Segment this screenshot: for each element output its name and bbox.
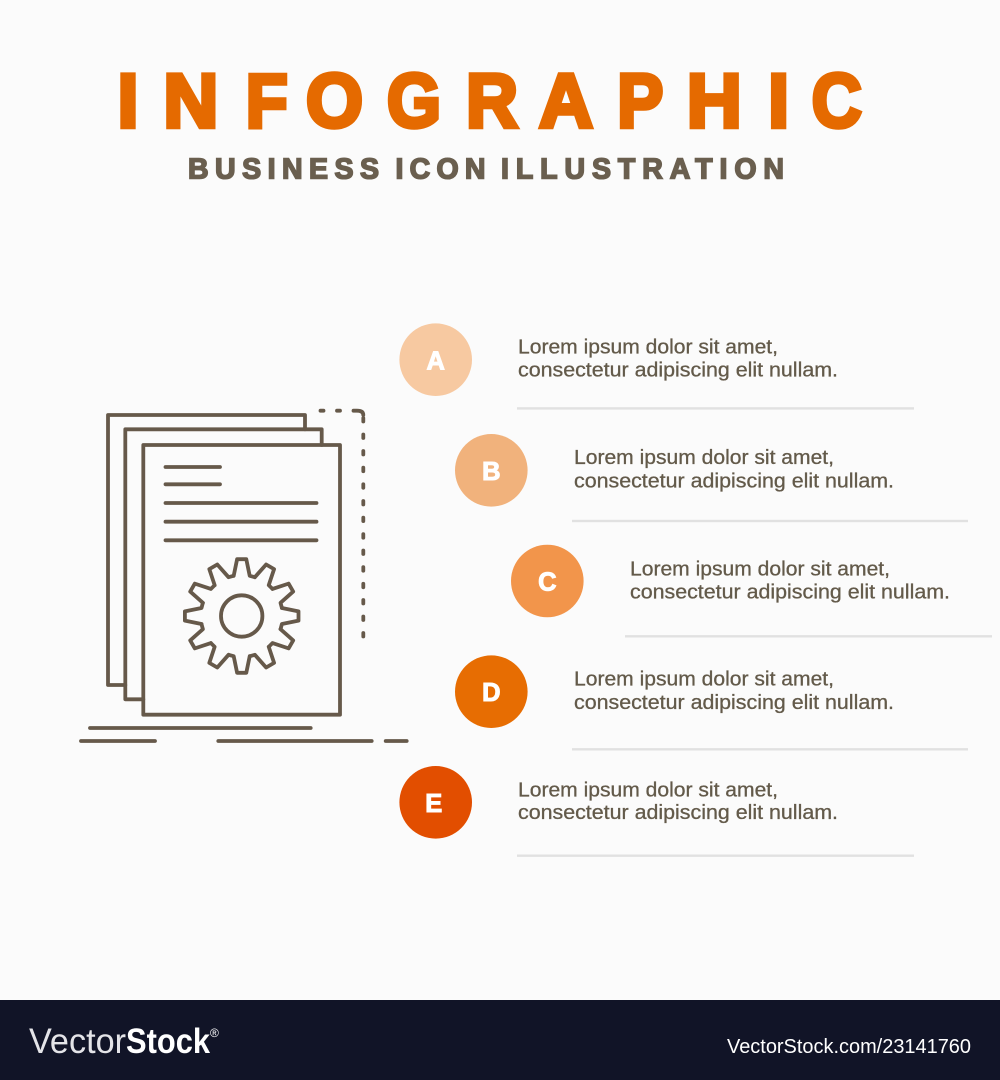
subtitle: BUSINESS: [188, 154, 379, 186]
title: P: [617, 59, 663, 144]
title: F: [246, 59, 288, 144]
letter E: E: [425, 790, 442, 818]
divider C: [625, 635, 992, 638]
text B: consectetur adipiscing elit nullam.: [574, 470, 894, 492]
circle C: [511, 545, 584, 617]
text E: consectetur adipiscing elit nullam.: [518, 802, 838, 824]
footer logo: [29, 1022, 219, 1061]
footer logo: Vector: [29, 1022, 126, 1061]
circle B: [455, 434, 528, 507]
front page: [143, 445, 340, 715]
divider A: [517, 407, 914, 410]
step E: [399, 766, 914, 857]
text C: consectetur adipiscing elit nullam.: [630, 582, 950, 604]
title: O: [306, 59, 363, 144]
gear: [185, 559, 298, 673]
text D: Lorem ipsum dolor sit amet,: [574, 669, 834, 691]
title: H: [687, 59, 742, 144]
text C: Lorem ipsum dolor sit amet,: [630, 559, 890, 581]
letter D: D: [482, 679, 501, 707]
step B: [455, 434, 968, 522]
subtitle: ICON: [396, 154, 486, 186]
dashed outline: [320, 411, 363, 636]
subtitle: ILLUSTRATION: [501, 154, 784, 186]
icon: documents with gear: [81, 411, 407, 741]
subtitle: [188, 154, 784, 186]
circle A: [399, 323, 472, 396]
divider B: [572, 520, 968, 522]
letter A: A: [426, 348, 445, 376]
back page: [108, 415, 305, 685]
footer logo: Stock: [126, 1022, 210, 1061]
letter B: B: [482, 458, 501, 486]
title: [118, 59, 862, 144]
circle D: [455, 655, 528, 728]
step A: [399, 323, 914, 410]
title: N: [163, 59, 218, 144]
text lines on page: [166, 467, 316, 540]
text A: consectetur adipiscing elit nullam.: [518, 360, 838, 382]
text E: Lorem ipsum dolor sit amet,: [518, 779, 778, 801]
divider E: [517, 854, 914, 857]
letter C: C: [538, 568, 557, 596]
footer id: VectorStock.com/23141760: [727, 1036, 971, 1058]
divider D: [572, 748, 968, 750]
title: I: [768, 59, 789, 144]
title: G: [387, 59, 441, 144]
title: R: [466, 59, 518, 144]
title: I: [118, 59, 138, 144]
footer bar: [0, 1000, 1000, 1080]
title: A: [539, 59, 593, 144]
middle page: [125, 429, 322, 699]
ground lines: [81, 728, 407, 741]
text A: Lorem ipsum dolor sit amet,: [518, 336, 778, 358]
text B: Lorem ipsum dolor sit amet,: [574, 447, 834, 469]
circle E: [399, 766, 472, 839]
title: C: [812, 59, 862, 144]
footer logo: ®: [210, 1026, 219, 1040]
text D: consectetur adipiscing elit nullam.: [574, 692, 894, 714]
step C: [511, 545, 992, 638]
step D: [455, 655, 968, 750]
